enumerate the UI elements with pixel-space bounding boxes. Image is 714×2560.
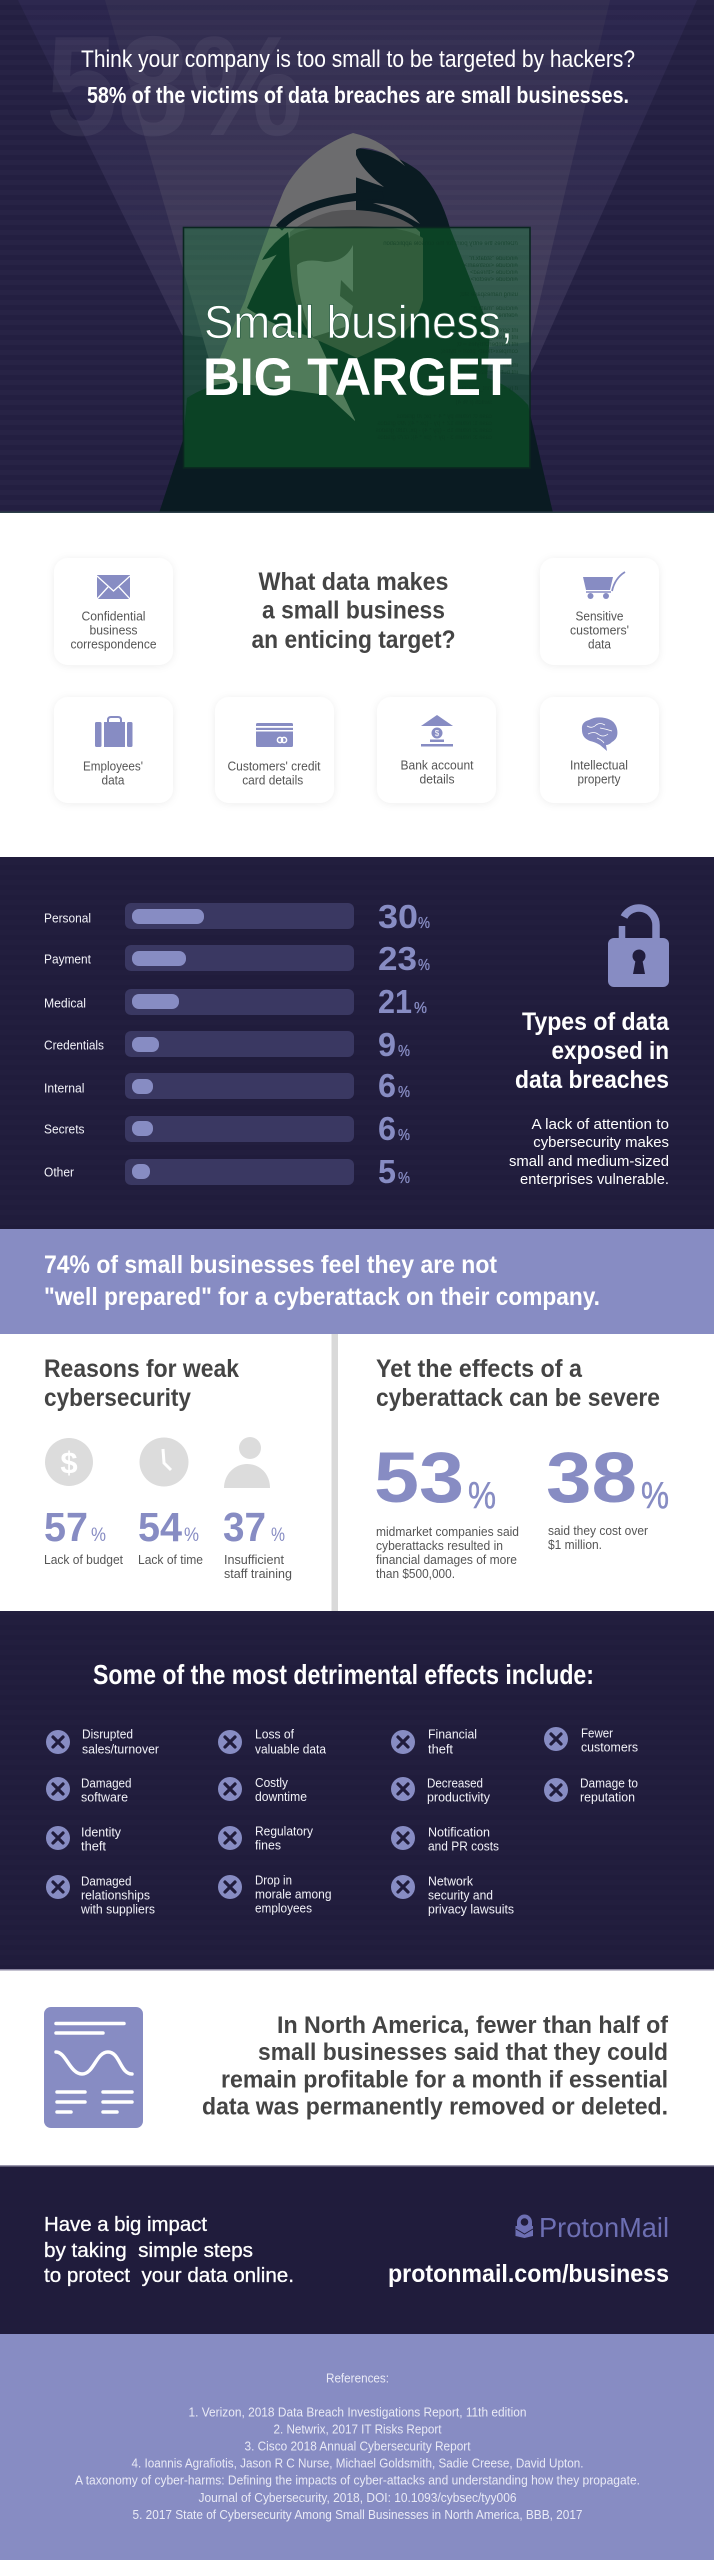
hero statement: 58% of the victims of data breaches are small businesses. xyxy=(87,82,629,108)
banner: 74% xyxy=(0,1229,714,1334)
references list: 3. Cisco 2018 Annual Cybersecurity Report xyxy=(244,2438,471,2454)
mirrored code on screen: case 2: return 15 - (py * 4) - px; /180 grados xyxy=(376,428,492,434)
heading: a small business xyxy=(262,596,445,624)
item: drop in morale: employees xyxy=(255,1900,312,1916)
label xyxy=(228,758,321,788)
item: damage to reputation xyxy=(544,1776,638,1804)
item: regulatory fines: fines xyxy=(255,1838,281,1852)
item: drop in morale: morale among xyxy=(255,1886,332,1902)
item: fewer customers: Fewer xyxy=(581,1726,614,1740)
banner: 74%: "well prepared" for a cyberattack on their company. xyxy=(44,1283,600,1311)
item: damaged relationships: with suppliers xyxy=(80,1902,155,1916)
stat: insufficient staff training xyxy=(223,1437,292,1581)
icon: brain xyxy=(582,717,617,751)
bar: other 5%: % xyxy=(398,1170,410,1187)
card: correspondence xyxy=(54,558,173,665)
stat: 53%: financial damages of more xyxy=(376,1552,517,1567)
heading: data breaches xyxy=(515,1066,669,1094)
heading: an enticing target? xyxy=(252,626,456,654)
logo: ProtonMail: ProtonMail xyxy=(539,2212,669,2243)
watermark: 58%: 58% xyxy=(46,7,303,166)
text block: enterprises vulnerable. xyxy=(520,1171,669,1188)
stat: 38%: 38 xyxy=(546,1439,637,1518)
link: protonmail.com/business xyxy=(388,2260,669,2288)
stat: lack of time: Lack of time xyxy=(138,1552,203,1567)
label: customers' xyxy=(570,622,629,638)
label xyxy=(70,608,156,652)
text block: remain profitable for a month if essential xyxy=(221,2066,668,2094)
mirrored code on screen xyxy=(376,241,518,441)
item: decreased productivity xyxy=(391,1776,490,1804)
item: damaged relationships: relationships xyxy=(81,1888,150,1902)
mirrored code on screen: #include <vector> xyxy=(470,277,518,283)
mirrored code on screen: int err = 0; int count = 0; int n; xyxy=(440,363,518,369)
mirrored code on screen: int screen_height; xyxy=(470,335,518,341)
column 3 xyxy=(391,1726,514,1916)
label xyxy=(83,758,143,788)
mirrored code on screen: #define WIDTH 800 xyxy=(465,313,518,319)
bar: secrets 6%: 6 xyxy=(378,1110,396,1147)
bar: medical 21%: 21 xyxy=(378,983,412,1020)
mirrored code on screen: complex<float> pixel = bytes; xyxy=(440,349,518,355)
illustration: hooded hacker xyxy=(159,133,553,513)
item: lawsuits: Network xyxy=(428,1874,473,1888)
heading: effects: Yet the effects of a xyxy=(376,1355,583,1383)
heading: effects: cyberattack can be severe xyxy=(376,1384,660,1412)
heading: exposed in xyxy=(552,1037,669,1065)
item: loss of data: valuable data xyxy=(255,1742,327,1756)
card: customers data xyxy=(540,558,659,665)
item: fewer customers xyxy=(544,1726,638,1754)
text block xyxy=(44,2214,294,2287)
label: Sensitive xyxy=(576,608,624,624)
icon: bank: $ xyxy=(435,729,440,738)
icon: open padlock xyxy=(608,908,669,987)
item: notification costs xyxy=(391,1824,499,1854)
heading: effects xyxy=(376,1355,660,1412)
bar: credentials 9%: 9 xyxy=(378,1026,396,1063)
stat: 53%: than $500,000. xyxy=(376,1566,455,1581)
references list: 4. Ioannis Agrafiotis, Jason R C Nurse, Michael Goldsmith, Sadie Creese, David Upton. xyxy=(132,2456,584,2470)
mirrored code on screen: case 3: return 3 - py + (px * 4); /270 grados xyxy=(377,435,492,441)
text block xyxy=(509,1116,669,1188)
references heading: References: xyxy=(326,2370,389,2386)
label: correspondence xyxy=(70,636,156,652)
item: costly downtime: downtime xyxy=(255,1789,307,1804)
label: Employees' xyxy=(83,758,143,774)
references list: 1. Verizon, 2018 Data Breach Investigations Report, 11th edition xyxy=(188,2404,526,2420)
icon: envelope xyxy=(97,575,130,599)
heading xyxy=(515,1008,670,1094)
stat: 38%: % xyxy=(641,1475,669,1517)
icon: shopping cart xyxy=(583,572,625,599)
column 4 xyxy=(544,1726,638,1804)
label: card details xyxy=(242,772,304,788)
bar: internal 6%: 6 xyxy=(378,1067,396,1104)
card: intellectual property xyxy=(540,697,659,803)
item: notification costs: Notification xyxy=(428,1824,490,1840)
item: loss of data xyxy=(218,1726,327,1756)
text block: cybersecurity makes xyxy=(533,1134,669,1151)
bar: secrets 6% xyxy=(44,1110,410,1147)
main title: Small business, xyxy=(204,296,513,348)
stat: 53% xyxy=(374,1439,519,1581)
heading: Some of the most detrimental effects include: xyxy=(93,1659,594,1690)
icon: person xyxy=(224,1437,270,1488)
mirrored code on screen: case 1: return 12 + py - (px * 4); /90 grados xyxy=(377,421,492,427)
mirrored code on screen: #include <iostream> xyxy=(463,263,518,269)
bar: internal 6% xyxy=(44,1067,410,1104)
text block xyxy=(202,2012,669,2120)
references list xyxy=(75,2404,640,2522)
stat: insufficient staff training: 37 xyxy=(223,1504,266,1550)
heading: reasons: cybersecurity xyxy=(44,1384,191,1412)
heading xyxy=(252,568,456,654)
bar: personal 30%: Personal xyxy=(44,910,91,926)
banner: 74%: 74% of small businesses feel they are not xyxy=(44,1251,498,1279)
card: bank account xyxy=(377,697,496,803)
heading: Types of data xyxy=(522,1008,670,1036)
stat: 53%: 53 xyxy=(374,1439,464,1518)
bar: medical 21%: % xyxy=(414,1000,427,1017)
label xyxy=(570,758,628,786)
mirrored code on screen: #include "math.h" xyxy=(471,306,518,312)
stat: lack of budget xyxy=(44,1438,123,1567)
bar: internal 6%: Internal xyxy=(44,1080,85,1096)
label: Bank account xyxy=(400,758,474,772)
panel: call to action xyxy=(0,2165,714,2334)
references list: Journal of Cybersecurity, 2018, DOI: 10.1093/cybsec/tyy006 xyxy=(198,2490,516,2505)
panel: reasons and effects xyxy=(0,1334,714,1611)
item: damaged software: software xyxy=(81,1790,128,1804)
item: regulatory fines: Regulatory xyxy=(255,1824,313,1838)
item: drop in morale xyxy=(218,1872,332,1916)
heading: What data makes xyxy=(258,568,448,596)
panel: what data makes a target xyxy=(0,513,714,857)
stat: insufficient staff training: staff training xyxy=(224,1566,292,1581)
item: drop in morale: Drop in xyxy=(255,1872,292,1888)
item: disrupted sales: Disrupted xyxy=(82,1726,133,1742)
text block: small businesses said that they could xyxy=(258,2039,668,2066)
item: lawsuits: privacy lawsuits xyxy=(428,1902,514,1916)
bar: personal 30% xyxy=(44,898,430,935)
item: financial theft xyxy=(391,1726,477,1756)
stat: insufficient staff training: % xyxy=(271,1525,285,1546)
panel: detrimental effects xyxy=(0,1611,714,1970)
text block: data was permanently removed or deleted. xyxy=(202,2094,668,2120)
panel: north america statistic xyxy=(0,1971,714,2166)
item: identity theft: Identity xyxy=(81,1824,121,1840)
label: Confidential xyxy=(82,608,146,624)
item: loss of data: Loss of xyxy=(255,1726,294,1742)
mirrored code on screen: #include "stdafx.h" xyxy=(469,256,518,262)
stat: lack of budget: 57 xyxy=(44,1504,88,1550)
item: notification costs: and PR costs xyxy=(428,1838,499,1854)
item: lawsuits: security and xyxy=(428,1888,493,1902)
label: data xyxy=(588,636,612,652)
item: damaged relationships xyxy=(46,1874,155,1916)
monitor screen xyxy=(184,228,530,468)
label: Intellectual xyxy=(570,758,628,772)
bar: payment 23%: 23 xyxy=(378,940,417,977)
mirrored code on screen: if (y > 0) print_line("No graphics cards found"); xyxy=(395,386,518,392)
column 2 xyxy=(218,1726,332,1916)
stat: lack of time: 54 xyxy=(138,1504,182,1550)
stat: lack of time xyxy=(138,1438,203,1567)
main title: BIG TARGET xyxy=(203,348,512,407)
item: financial theft: Financial xyxy=(428,1726,477,1742)
card: employees data xyxy=(54,697,173,803)
mirrored code on screen: int screen_width; xyxy=(473,328,518,334)
bar: other 5%: 5 xyxy=(378,1153,396,1190)
mirrored code on screen: int buffer = sizeof(pixel) * width; xyxy=(434,370,518,376)
stat: 38%: $1 million. xyxy=(548,1537,602,1552)
bar: payment 23% xyxy=(44,940,430,977)
text block: A lack of attention to xyxy=(532,1116,669,1133)
label: business xyxy=(90,622,138,638)
bar: credentials 9%: % xyxy=(398,1043,410,1060)
item: damaged software: Damaged xyxy=(81,1776,132,1790)
heading: reasons: Reasons for weak xyxy=(44,1355,239,1383)
label xyxy=(400,758,474,786)
item: damaged software xyxy=(46,1776,132,1804)
text block: by taking simple steps xyxy=(44,2240,253,2262)
icon: dollar coin: $ xyxy=(60,1445,78,1480)
bar: secrets 6%: % xyxy=(398,1127,410,1144)
stat: 53%: cyberattacks resulted in xyxy=(376,1538,503,1553)
item: lawsuits xyxy=(391,1874,514,1916)
icon: briefcase xyxy=(95,717,132,747)
stat: lack of time: % xyxy=(184,1525,199,1546)
item: regulatory fines xyxy=(218,1824,313,1852)
hero question: Think your company is too small to be targeted by hackers? xyxy=(81,46,635,73)
references list: A taxonomy of cyber-harms: Defining the impacts of cyber-attacks and understanding how they propagate. xyxy=(75,2472,640,2488)
stat: 53%: % xyxy=(468,1475,496,1517)
item: decreased productivity: productivity xyxy=(427,1790,490,1804)
stat: 38%: said they cost over xyxy=(548,1523,649,1538)
bar: internal 6%: % xyxy=(398,1084,410,1101)
mirrored code on screen: //Defines the entry point for the console application xyxy=(383,241,518,247)
panel: references xyxy=(0,2334,714,2560)
bar: other 5% xyxy=(44,1153,410,1190)
bar: secrets 6%: Secrets xyxy=(44,1122,85,1136)
icon: report document xyxy=(44,2007,143,2128)
mirrored code on screen: int numberOfBytes = 0; xyxy=(456,342,518,348)
main title xyxy=(203,296,513,407)
item: fewer customers: customers xyxy=(581,1740,638,1754)
references list: 5. 2017 State of Cybersecurity Among Small Businesses in North America, BBB, 2017 xyxy=(132,2507,582,2522)
label xyxy=(570,608,629,652)
heading: reasons xyxy=(44,1355,239,1412)
mirrored code on screen: case 0: return py * 4 + px; /0 grados xyxy=(397,414,492,420)
text block: to protect your data online. xyxy=(44,2265,294,2287)
label: property xyxy=(578,772,621,786)
column 1 xyxy=(46,1726,160,1916)
mirrored code on screen: switch (r % 4) xyxy=(456,400,492,406)
item: disrupted sales xyxy=(46,1726,160,1756)
panel: types of data exposed xyxy=(0,857,714,1230)
card: credit card xyxy=(215,697,334,803)
text block: small and medium-sized xyxy=(509,1153,669,1170)
panel: hero xyxy=(0,0,714,513)
item: damage to reputation: reputation xyxy=(580,1790,635,1804)
bar: personal 30%: 30 xyxy=(378,898,418,935)
item: identity theft xyxy=(46,1824,121,1854)
label: Customers' credit xyxy=(228,758,321,774)
bar: credentials 9%: Credentials xyxy=(44,1038,104,1052)
text block: In North America, fewer than half of xyxy=(277,2012,669,2039)
item: damage to reputation: Damage to xyxy=(580,1776,638,1790)
bar chart xyxy=(44,898,430,1190)
item: costly downtime: Costly xyxy=(255,1775,288,1790)
label: details xyxy=(420,772,455,786)
label: data xyxy=(102,772,125,788)
stat: 53%: midmarket companies said xyxy=(376,1524,519,1539)
bar: other 5%: Other xyxy=(44,1164,75,1180)
mirrored code on screen: #include <thread> xyxy=(469,270,518,276)
item: decreased productivity: Decreased xyxy=(427,1776,483,1790)
bar: medical 21%: Medical xyxy=(44,996,86,1010)
bar: payment 23%: Payment xyxy=(44,952,91,966)
stat: lack of budget: % xyxy=(91,1525,106,1546)
text block: Have a big impact xyxy=(44,2214,207,2236)
bar: payment 23%: % xyxy=(418,957,430,974)
references list: 2. Netwrix, 2017 IT Risks Report xyxy=(274,2422,442,2436)
icon: clock xyxy=(140,1438,188,1486)
bar: credentials 9% xyxy=(44,1026,410,1063)
mirrored code on screen: using namespace std; xyxy=(459,292,518,298)
item: damaged relationships: Damaged xyxy=(81,1874,132,1888)
item: financial theft: theft xyxy=(428,1742,453,1756)
stat: lack of budget: Lack of budget xyxy=(44,1552,123,1567)
stat: 38% xyxy=(546,1439,669,1552)
bar: medical 21% xyxy=(44,983,427,1020)
item: costly downtime xyxy=(218,1775,307,1804)
item: identity theft: theft xyxy=(81,1838,106,1854)
item: disrupted sales: sales/turnover xyxy=(82,1742,160,1756)
bar: personal 30%: % xyxy=(418,915,430,932)
icon: credit card xyxy=(256,723,293,747)
stat: insufficient staff training: Insufficient xyxy=(224,1552,284,1567)
